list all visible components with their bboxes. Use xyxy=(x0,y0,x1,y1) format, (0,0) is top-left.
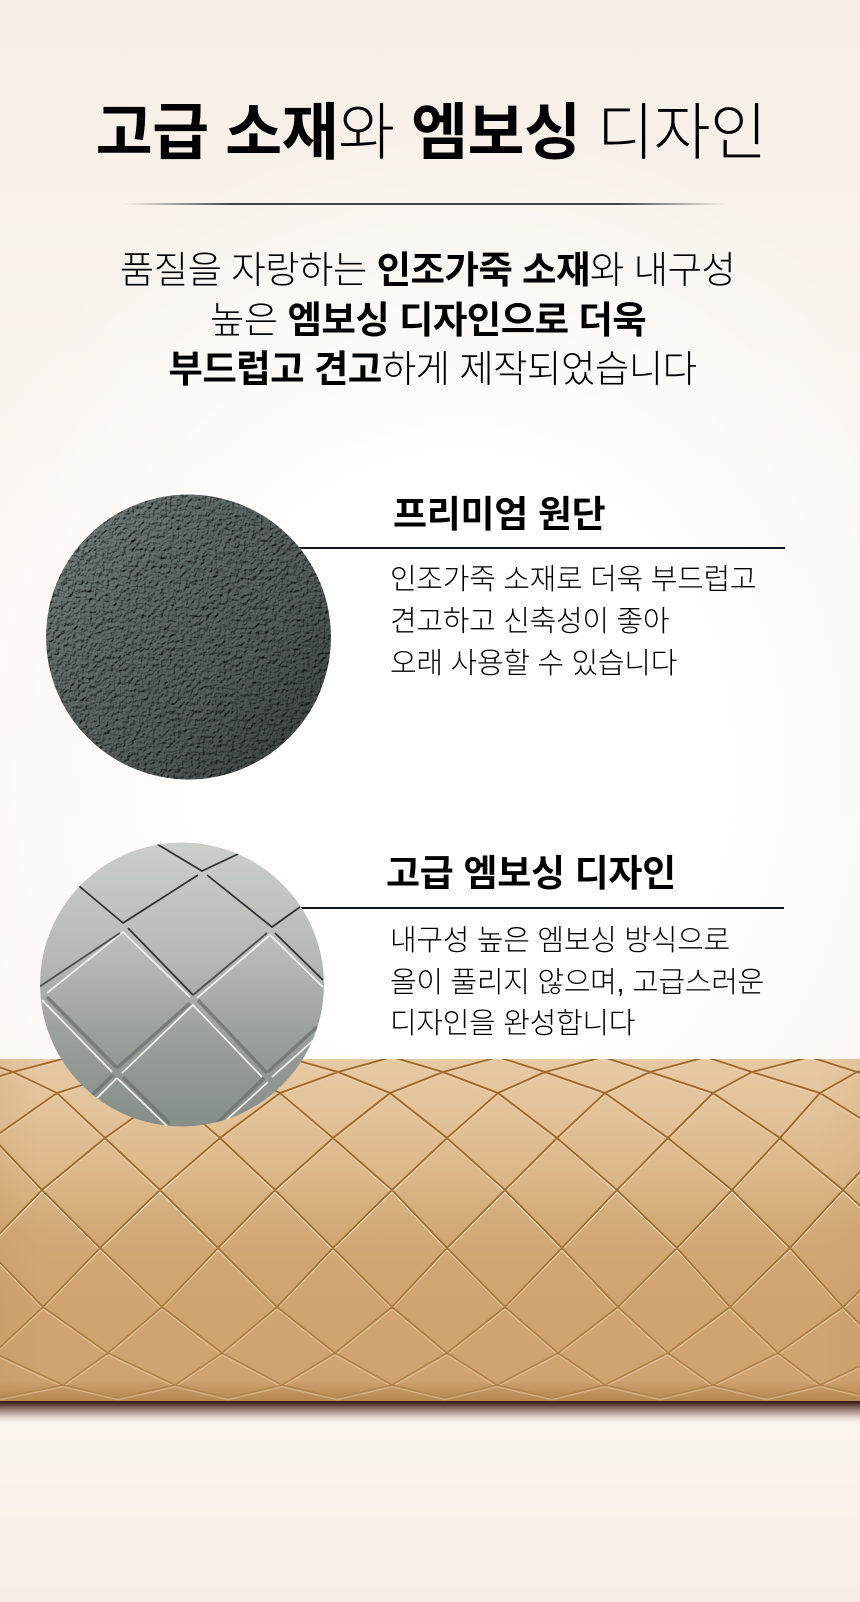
text: embossing description: 내구성 높은 엠보싱 방식으로 xyxy=(390,925,730,957)
text: embossing description: 디자인을 완성합니다 xyxy=(390,1008,635,1040)
text: embossing description xyxy=(390,925,764,1040)
title: 고급 소재와 엠보싱 디자인 xyxy=(96,99,766,168)
heading: embossing design: 고급 엠보싱 디자인 xyxy=(386,853,676,894)
intro paragraph: 높은 엠보싱 디자인으로 더욱 xyxy=(210,299,646,341)
title divider xyxy=(124,203,726,205)
icon: embossed quilting circle xyxy=(40,842,324,1126)
text: premium fabric description: 인조가죽 소재로 더욱 부드럽고 xyxy=(390,564,756,596)
text: premium fabric description xyxy=(390,564,756,680)
heading: premium fabric: 프리미엄 원단 xyxy=(393,494,605,535)
text: premium fabric description: 오래 사용할 수 있습니다 xyxy=(390,648,677,680)
text: premium fabric description: 견고하고 신축성이 좋아 xyxy=(390,606,669,638)
intro paragraph: 부드럽고 견고하게 제작되었습니다 xyxy=(168,348,697,390)
connector rule: embossing xyxy=(296,907,784,909)
intro paragraph xyxy=(120,249,735,390)
text: embossing description: 올이 풀리지 않으며, 고급스러운 xyxy=(390,966,764,998)
pillow illustration xyxy=(0,1059,860,1422)
icon: leather texture circle xyxy=(46,494,331,780)
connector rule: premium fabric xyxy=(296,547,785,549)
intro paragraph: 품질을 자랑하는 인조가죽 소재와 내구성 xyxy=(120,249,735,291)
